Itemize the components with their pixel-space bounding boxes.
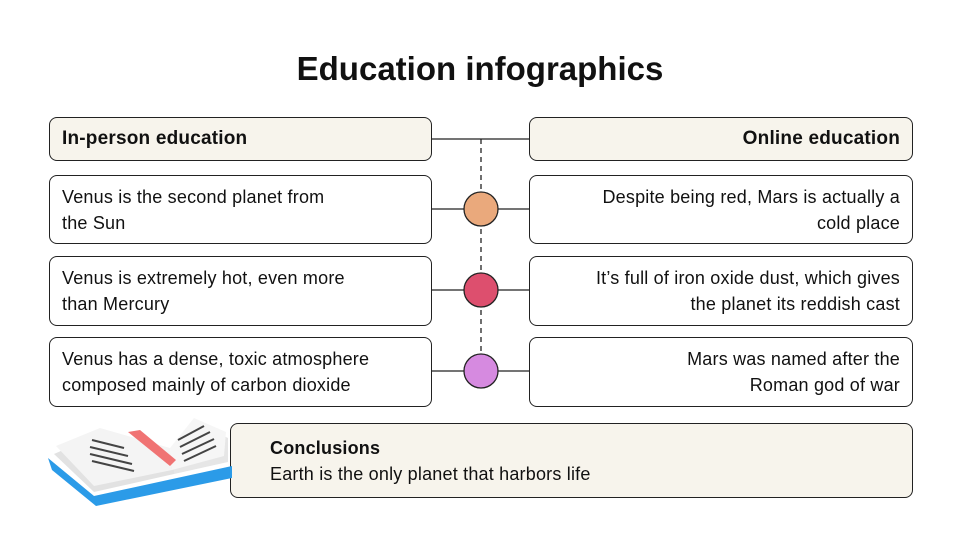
- left row 2: [49, 256, 432, 326]
- conclusions box: Conclusions: [270, 438, 380, 458]
- left row 3: composed mainly of carbon dioxide: [62, 375, 351, 395]
- right row 3: Roman god of war: [750, 375, 900, 395]
- right row 1: [529, 175, 913, 244]
- left row 1: [49, 175, 432, 244]
- right row 2: [529, 256, 913, 326]
- right row 3: Mars was named after the: [687, 349, 900, 369]
- left row 2: than Mercury: [62, 294, 169, 314]
- left row 3: Venus has a dense, toxic atmosphere: [62, 349, 369, 369]
- header: in-person: In-person education: [62, 128, 247, 149]
- right row 3: [529, 337, 913, 407]
- header: in-person: [49, 117, 432, 161]
- right row 2: It’s full of iron oxide dust, which gives: [596, 268, 900, 288]
- conclusions box: [230, 423, 913, 498]
- title: Education infographics: [297, 50, 663, 87]
- right row 1: cold place: [817, 212, 900, 232]
- left row 1: the Sun: [62, 212, 125, 232]
- header: online: [529, 117, 913, 161]
- left row 2: Venus is extremely hot, even more: [62, 268, 345, 288]
- right row 2: the planet its reddish cast: [690, 294, 900, 314]
- left row 3: [49, 337, 432, 407]
- icon: open book: [48, 418, 232, 506]
- right row 1: Despite being red, Mars is actually a: [602, 186, 900, 206]
- conclusions box: Earth is the only planet that harbors life: [270, 464, 591, 484]
- left row 1: Venus is the second planet from: [62, 186, 324, 206]
- header: online: Online education: [743, 128, 900, 149]
